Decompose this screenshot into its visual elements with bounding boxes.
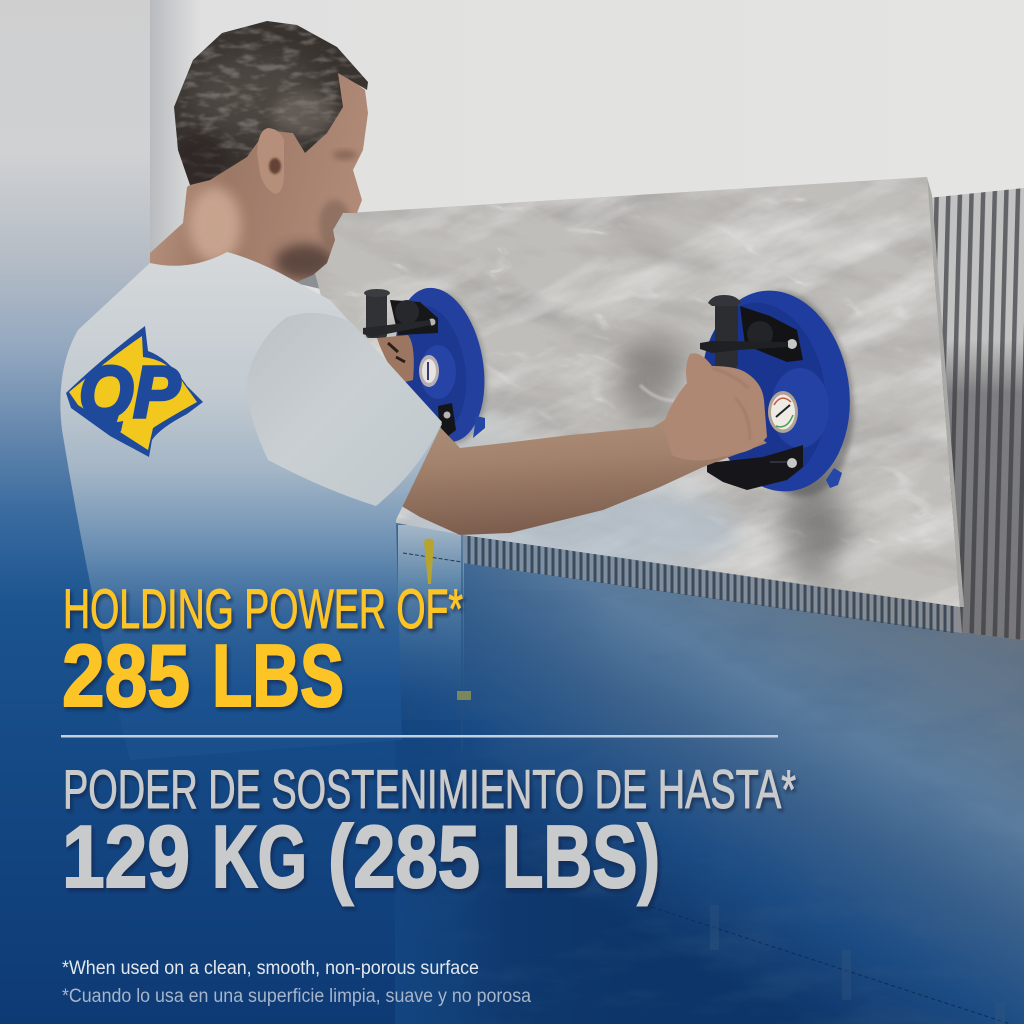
small ridge patch behind the collar <box>282 272 325 290</box>
pressure gauge <box>768 391 798 433</box>
value: 129 KG: 129 <box>62 807 190 906</box>
fist <box>663 353 767 460</box>
shirt body <box>60 252 442 760</box>
value: 285 LBS: LBS <box>212 626 344 725</box>
value: 129 KG <box>62 807 660 906</box>
QP logo on shirt: QP <box>79 353 181 433</box>
tile side edge <box>927 177 964 607</box>
suction cup: right <box>690 280 867 505</box>
notched adhesive ridges on the right <box>463 188 1024 640</box>
QP logo on shirt <box>66 326 203 457</box>
head and neck <box>150 73 368 282</box>
value: 285 LBS <box>62 626 344 725</box>
value: 285 LBS: 285 <box>62 626 190 725</box>
footnote: English: *When used on a clean, smooth, non-porous surface <box>62 958 479 979</box>
hair <box>170 15 370 190</box>
marble tile <box>315 177 960 607</box>
lower wall with old marble surface <box>395 515 1024 1024</box>
heading: holding power: HOLDING POWER OF* <box>63 577 463 640</box>
shirt sleeve <box>247 313 442 506</box>
divider <box>61 735 778 738</box>
layout line, clips and marks on the wall <box>403 535 1010 1024</box>
value: 129 KG: (285 <box>328 807 480 906</box>
worker <box>60 15 767 760</box>
value: 129 KG: LBS) <box>502 807 660 906</box>
footnote: Spanish: *Cuando lo usa en una superficie limpia, suave y no porosa <box>62 986 531 1007</box>
knuckle shading <box>712 368 750 440</box>
value: 129 KG: KG <box>212 807 307 906</box>
ear <box>257 128 284 194</box>
forearm <box>388 380 767 535</box>
suction cup: left <box>363 281 496 449</box>
